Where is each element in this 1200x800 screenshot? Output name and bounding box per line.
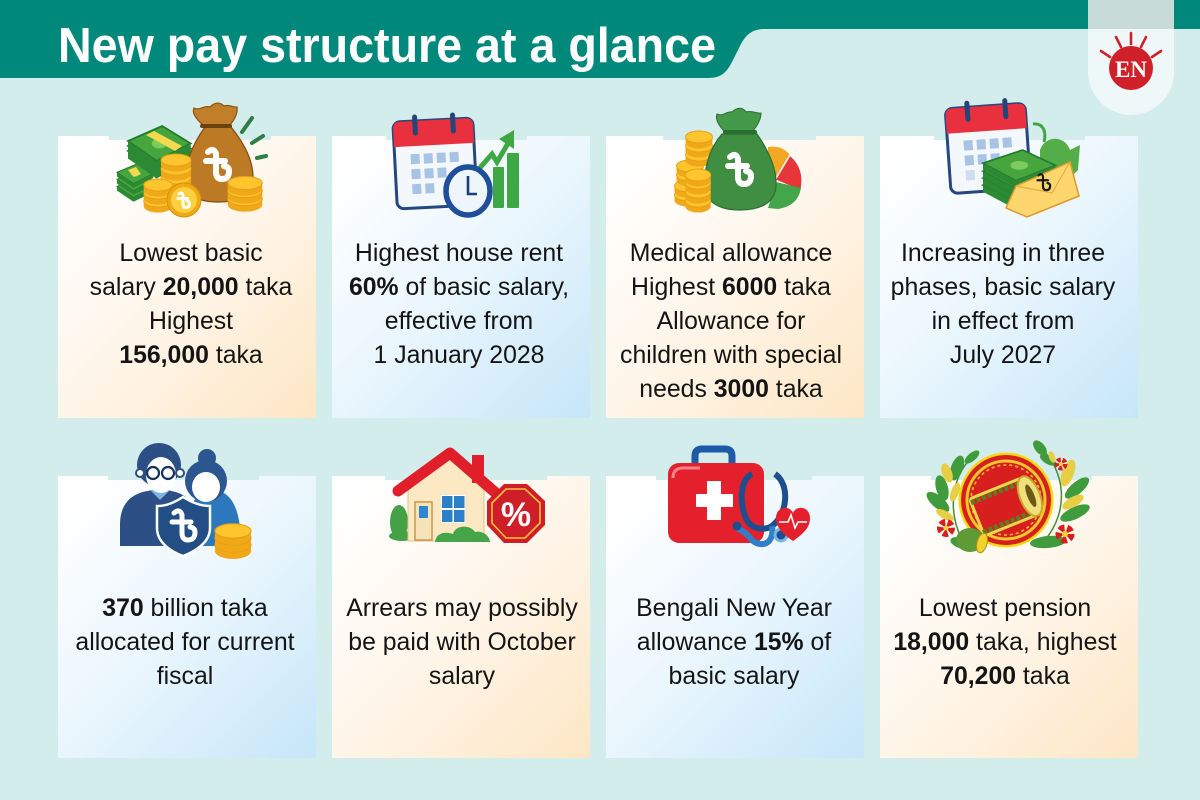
text: salary range: salary 20,000 taka bbox=[90, 274, 292, 301]
text: arrears: be paid with October bbox=[348, 629, 576, 656]
text: pension: Lowest pension bbox=[919, 595, 1091, 622]
icon: green money bag, coins and pie chart bbox=[674, 108, 802, 212]
icon: first aid kit, stethoscope and heart bbox=[668, 449, 810, 544]
title: New pay structure at a glance bbox=[58, 19, 716, 73]
panel: lowest and highest basic salary bbox=[58, 136, 316, 418]
text: house rent bbox=[349, 240, 569, 369]
panel: pension bbox=[880, 476, 1138, 758]
text: salary range: Highest bbox=[149, 308, 233, 335]
text: Bengali New Year allowance: Bengali New Year bbox=[636, 595, 832, 622]
icon: house with percent badge: % bbox=[501, 496, 531, 534]
header banner bbox=[0, 0, 1200, 78]
text: medical allowance: Allowance for bbox=[657, 308, 805, 335]
text: house rent: effective from bbox=[385, 308, 533, 335]
text: medical allowance: needs 3000 taka bbox=[639, 376, 823, 403]
panel: medical allowance bbox=[606, 136, 864, 418]
text: pension: 70,200 taka bbox=[940, 663, 1070, 690]
panel: arrears bbox=[332, 476, 590, 758]
text: pension bbox=[893, 595, 1117, 690]
text: three phases: July 2027 bbox=[950, 342, 1056, 369]
icon: elderly couple with shield and coins bbox=[120, 443, 251, 559]
text: arrears bbox=[346, 595, 578, 690]
text: pension: 18,000 taka, highest bbox=[893, 629, 1117, 656]
text: allocation: fiscal bbox=[157, 663, 213, 690]
text: house rent: 1 January 2028 bbox=[374, 342, 544, 369]
text: allocation: allocated for current bbox=[75, 629, 295, 656]
panel: Bengali New Year allowance bbox=[606, 476, 864, 758]
text: house rent: 60% of basic salary, bbox=[349, 274, 569, 301]
text: three phases: Increasing in three bbox=[901, 240, 1105, 267]
icon: money bag, cash and coins bbox=[117, 103, 266, 217]
logo badge: EN bbox=[1115, 57, 1147, 82]
text: Bengali New Year allowance: basic salary bbox=[669, 663, 799, 690]
text: salary range bbox=[90, 240, 292, 369]
icon: calendar, clock and growth chart bbox=[393, 114, 519, 215]
text: Bengali New Year allowance bbox=[636, 595, 832, 690]
text: salary range: 156,000 taka bbox=[119, 342, 263, 369]
text: Bengali New Year allowance: allowance 15% of bbox=[637, 629, 831, 656]
icon: festive drum with leaf wreath bbox=[923, 438, 1092, 554]
icon: house with percent badge bbox=[389, 453, 545, 543]
text: arrears: Arrears may possibly bbox=[346, 595, 578, 622]
text: medical allowance: Medical allowance bbox=[630, 240, 832, 267]
text: three phases: in effect from bbox=[932, 308, 1074, 335]
text: salary range: Lowest basic bbox=[119, 240, 263, 267]
text: medical allowance bbox=[620, 240, 842, 403]
text: medical allowance: children with special bbox=[620, 342, 842, 369]
text: allocation bbox=[75, 595, 295, 690]
panel: allocation bbox=[58, 476, 316, 758]
text: arrears: salary bbox=[429, 663, 495, 690]
text: house rent: Highest house rent bbox=[355, 240, 563, 267]
text: three phases: phases, basic salary bbox=[891, 274, 1115, 301]
panel: three phases bbox=[880, 136, 1138, 418]
logo badge bbox=[1088, 0, 1174, 115]
panel: house rent bbox=[332, 136, 590, 418]
text: three phases bbox=[891, 240, 1116, 369]
text: allocation: 370 billion taka bbox=[102, 595, 268, 622]
icon: calendar, cash and envelope bbox=[945, 99, 1080, 217]
text: medical allowance: Highest 6000 taka bbox=[631, 274, 831, 301]
